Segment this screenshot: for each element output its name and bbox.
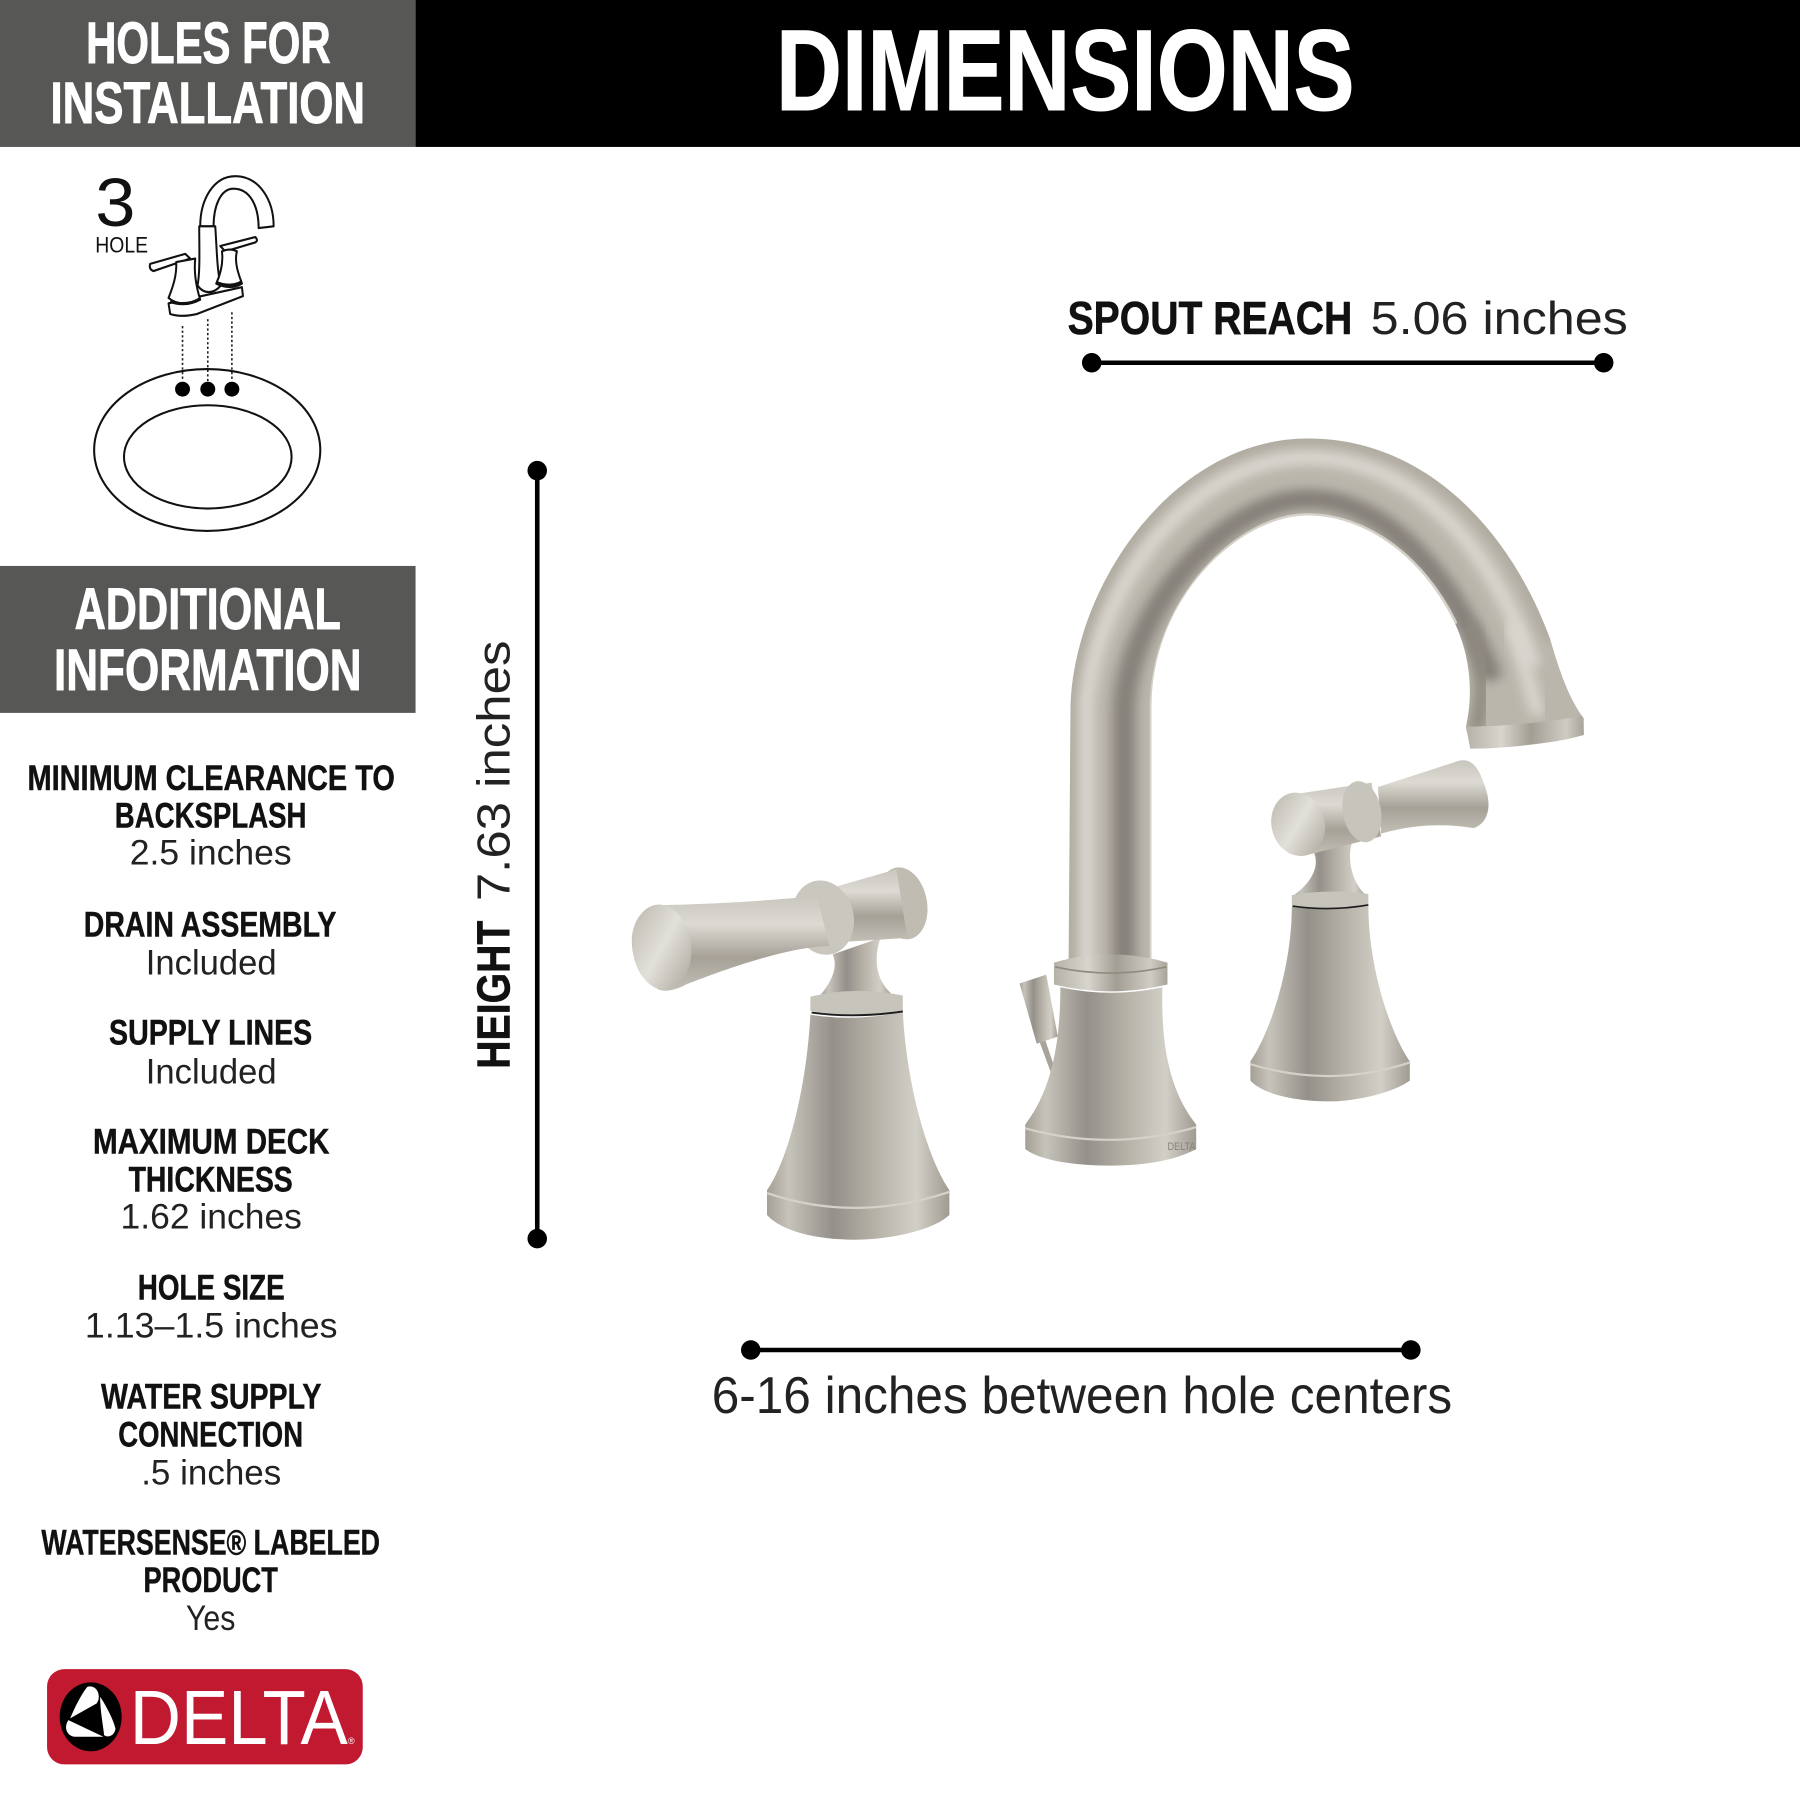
spec: minimum clearance	[28, 758, 395, 872]
spec: water supply connection: WATER SUPPLY	[101, 1377, 322, 1417]
spec: supply lines: SUPPLY LINES	[109, 1013, 312, 1053]
faucet: center base: DELTA	[1167, 1140, 1196, 1153]
logo: delta: ®	[348, 1736, 355, 1746]
heading bar: dimensions: DIMENSIONS	[776, 7, 1355, 135]
spec: watersense: PRODUCT	[143, 1560, 278, 1600]
spec: minimum clearance: 2.5 inches	[130, 832, 292, 872]
spec: maximum deck thickness: 1.62 inches	[121, 1196, 302, 1236]
heading bar: additional information: INFORMATION	[54, 638, 362, 703]
heading bar: holes for installation: INSTALLATION	[51, 71, 365, 136]
heading bar: dimensions	[416, 0, 1800, 147]
faucet: right handle	[1250, 760, 1489, 1101]
spec: water supply connection: CONNECTION	[118, 1414, 303, 1454]
spec: maximum deck thickness: MAXIMUM DECK	[93, 1122, 330, 1162]
dimension: height	[468, 461, 547, 1248]
heading bar: additional information: ADDITIONAL	[75, 577, 341, 642]
faucet: center base	[1025, 954, 1196, 1166]
heading bar: holes for installation	[0, 0, 416, 147]
spec: watersense	[41, 1522, 380, 1638]
spec: hole size: HOLE SIZE	[138, 1267, 285, 1307]
spec: maximum deck thickness: THICKNESS	[129, 1160, 293, 1200]
spec: water supply connection	[101, 1377, 322, 1492]
dimension: hole centers	[712, 1340, 1452, 1424]
spec list	[28, 758, 395, 1638]
spec: hole size: 1.13–1.5 inches	[85, 1305, 338, 1345]
spec: drain assembly	[84, 905, 337, 983]
spec: minimum clearance: MINIMUM CLEARANCE TO	[28, 758, 395, 798]
heading bar: additional information	[0, 566, 416, 713]
dimension: hole centers: 6-16 inches between hole centers	[712, 1366, 1452, 1424]
spec: drain assembly: DRAIN ASSEMBLY	[84, 905, 337, 945]
logo: delta: DELTA	[130, 1675, 348, 1761]
faucet: left handle	[628, 865, 949, 1240]
spec: hole size	[85, 1267, 338, 1345]
spec: maximum deck thickness	[93, 1122, 330, 1236]
spec: water supply connection: .5 inches	[141, 1452, 281, 1492]
spec: watersense: WATERSENSE® LABELED	[41, 1522, 380, 1562]
dimension: spout reach	[1068, 292, 1628, 373]
heading bar: holes for installation: HOLES FOR	[86, 11, 331, 76]
dimension: spout reach: 5.06 inches	[1371, 292, 1628, 344]
dimension: spout reach: SPOUT REACH	[1068, 292, 1352, 344]
dimension: height: HEIGHT	[468, 921, 520, 1069]
spec: supply lines: Included	[146, 1052, 277, 1092]
icon: three hole faucet and sink	[94, 164, 320, 531]
logo: delta	[47, 1669, 363, 1764]
product photo: faucet	[628, 439, 1584, 1240]
spec: watersense: Yes	[186, 1598, 235, 1638]
icon: three hole faucet and sink: 3	[95, 164, 135, 241]
spec: drain assembly: Included	[146, 943, 277, 983]
spec: minimum clearance: BACKSPLASH	[115, 796, 307, 836]
icon: three hole faucet and sink: HOLE	[95, 233, 148, 258]
spec: supply lines	[109, 1013, 312, 1092]
faucet: spout	[1069, 439, 1584, 968]
dimension: height: 7.63 inches	[468, 641, 520, 901]
faucet: drain lever	[1020, 975, 1060, 1084]
